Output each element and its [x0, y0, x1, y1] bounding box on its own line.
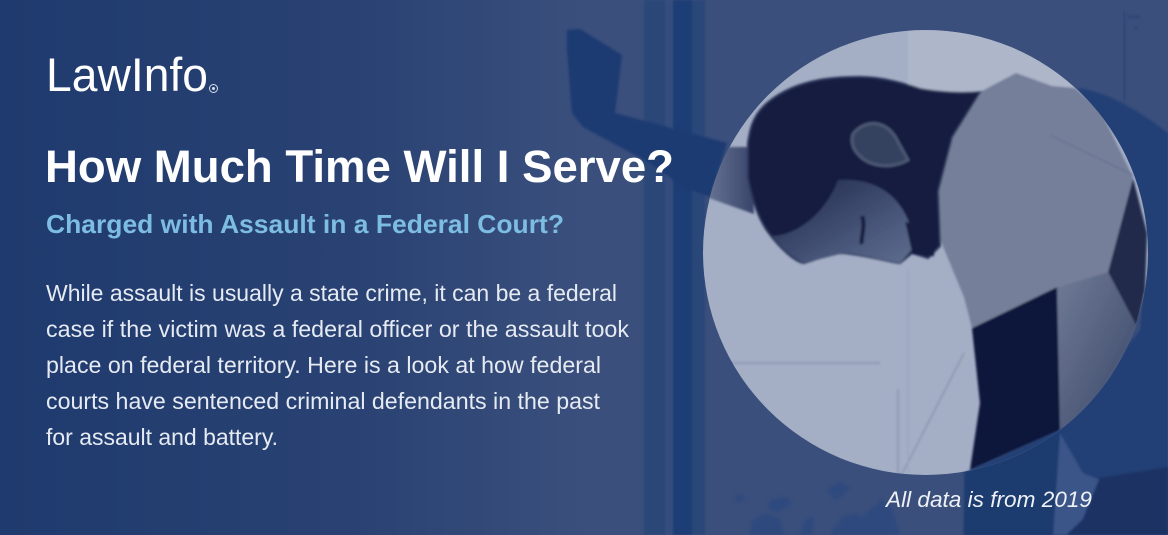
body bottom right shade [1067, 467, 1168, 535]
lower back [1057, 272, 1137, 430]
head and hair [748, 77, 980, 263]
door frame [644, 0, 705, 535]
shirt [938, 73, 1133, 328]
top right wall fixture [1124, 12, 1140, 100]
wall corner [906, 30, 1088, 100]
intro paragraph: for assault and battery. [46, 424, 278, 450]
circle background [703, 30, 1148, 475]
data source note: All data is from 2019 [884, 487, 1092, 512]
title: How Much Time Will I Serve? [45, 141, 674, 192]
figure silhouette outside circle: back and body [964, 88, 1168, 535]
figure silhouette outside circle: arm and hand [567, 29, 727, 197]
body lower left band [964, 432, 1060, 535]
body lighter band [1053, 433, 1100, 535]
logo registered mark [210, 84, 218, 92]
dark back [1108, 178, 1147, 327]
intro paragraph: case if the victim was a federal officer or the assault took [46, 316, 630, 342]
photo circle [703, 30, 1150, 480]
intro paragraph: While assault is usually a state crime, it can be a federal [46, 280, 617, 306]
subtitle: Charged with Assault in a Federal Court? [46, 209, 564, 239]
shirt sleeve seam [1130, 173, 1134, 176]
logo [46, 48, 218, 101]
intro paragraph: place on federal territory. Here is a look at how federal [46, 352, 601, 378]
man in circle [706, 30, 1150, 480]
eye and beard [862, 216, 934, 254]
logo wordmark: LawInfo [46, 48, 208, 101]
intro paragraph [46, 280, 630, 450]
forearm [706, 147, 754, 214]
dark arm [970, 287, 1060, 470]
intro paragraph: courts have sentenced criminal defendants in the past [46, 388, 601, 414]
face [772, 180, 915, 263]
ear [852, 124, 908, 166]
plant at bottom [734, 482, 900, 535]
body overlay over circle [965, 426, 1064, 472]
